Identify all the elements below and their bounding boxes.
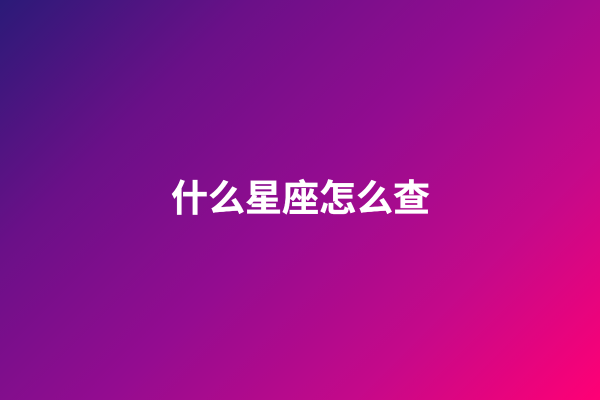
title: 什么星座怎么查 [171,178,430,219]
